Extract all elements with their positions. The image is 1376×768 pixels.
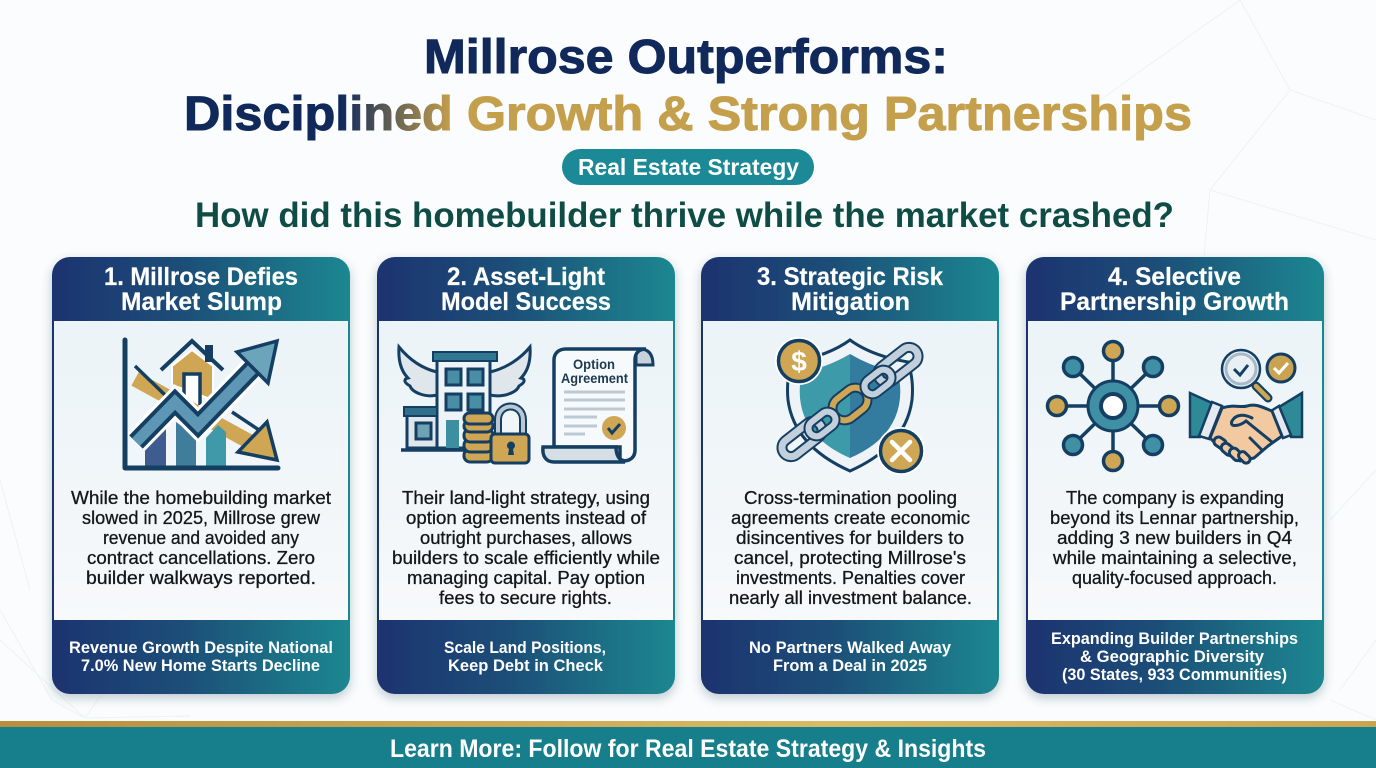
card 3 footer: From a Deal in 2025 bbox=[773, 657, 927, 675]
card 1 footer: Revenue Growth Despite National bbox=[69, 639, 333, 657]
category pill bbox=[562, 149, 814, 185]
panel: card 3 bbox=[701, 257, 999, 694]
card 4 footer: (30 States, 933 Communities) bbox=[1062, 666, 1287, 684]
title bbox=[184, 31, 1192, 141]
card 2 body text bbox=[392, 488, 660, 608]
card 1 body text: revenue and avoided any bbox=[103, 528, 299, 548]
card 4 body text: adding 3 new builders in Q4 bbox=[1057, 528, 1292, 548]
card 2 footer: Scale Land Positions, bbox=[444, 639, 606, 657]
card 4 heading: Partnership Growth bbox=[1060, 288, 1289, 316]
icon: option agreement document bbox=[543, 349, 653, 462]
card 2 body text: Their land-light strategy, using bbox=[402, 488, 650, 508]
card 2 footer bbox=[444, 639, 606, 675]
card 2 footer: Keep Debt in Check bbox=[448, 657, 604, 675]
card 4 body text: quality-focused approach. bbox=[1072, 568, 1277, 588]
card 1 body text bbox=[71, 488, 331, 588]
card 2 heading bbox=[441, 263, 611, 316]
card 1 body text: builder walkways reported. bbox=[86, 568, 316, 588]
card 2 body text: fees to secure rights. bbox=[439, 588, 612, 608]
card 4 body text: beyond its Lennar partnership, bbox=[1050, 508, 1299, 528]
icon: handshake with magnifier bbox=[1190, 350, 1302, 465]
card 1 heading bbox=[104, 263, 298, 316]
card 1 footer bbox=[69, 639, 333, 675]
title: Disciplined Growth & Strong Partnerships bbox=[184, 88, 1192, 141]
question subtitle: How did this homebuilder thrive while the market crashed? bbox=[195, 196, 1174, 235]
card 1 body text: slowed in 2025, Millrose grew bbox=[82, 508, 321, 528]
card 3 body text bbox=[729, 488, 972, 608]
card 3 body text: investments. Penalties cover bbox=[736, 568, 965, 588]
panel: card 2 bbox=[377, 257, 675, 694]
card 2 body text: managing capital. Pay option bbox=[407, 568, 645, 588]
card 3 heading: 3. Strategic Risk bbox=[757, 263, 943, 291]
document title bbox=[561, 357, 628, 386]
card 2 heading: 2. Asset-Light bbox=[447, 263, 606, 291]
document title: Agreement bbox=[561, 371, 628, 386]
panel: card 4 bbox=[1026, 257, 1324, 694]
card 4 heading bbox=[1060, 263, 1289, 316]
document title: Option bbox=[573, 357, 615, 372]
card 2 body text: outright purchases, allows bbox=[420, 528, 632, 548]
card 4 footer bbox=[1051, 630, 1298, 684]
card 4 footer: Expanding Builder Partnerships bbox=[1051, 630, 1298, 648]
icon: winged building, coins and lock bbox=[399, 347, 530, 463]
card 1 body text: contract cancellations. Zero bbox=[87, 548, 315, 568]
card 4 footer: & Geographic Diversity bbox=[1080, 648, 1265, 666]
card 4 body text: while maintaining a selective, bbox=[1052, 548, 1297, 568]
card 1 footer: 7.0% New Home Starts Decline bbox=[81, 657, 320, 675]
card 3 footer: No Partners Walked Away bbox=[749, 639, 952, 657]
footer banner bbox=[0, 721, 1376, 768]
card 3 body text: cancel, protecting Millrose's bbox=[734, 548, 966, 568]
card 3 body text: agreements create economic bbox=[731, 508, 970, 528]
icon: cancel badge bbox=[877, 427, 925, 475]
card 4 body text bbox=[1050, 488, 1299, 588]
icon: dollar coin: $ bbox=[791, 346, 807, 377]
card 2 heading: Model Success bbox=[441, 288, 611, 316]
card 4 heading: 4. Selective bbox=[1108, 263, 1241, 291]
icon: market chart with house bbox=[125, 340, 278, 470]
card 3 footer bbox=[749, 639, 952, 675]
card 1 heading: Market Slump bbox=[121, 288, 282, 316]
card 3 body text: Cross-termination pooling bbox=[744, 488, 957, 508]
icon: dollar coin bbox=[775, 337, 823, 385]
card 3 heading bbox=[757, 263, 943, 316]
card 2 body text: builders to scale efficiently while bbox=[392, 548, 660, 568]
card 3 body text: nearly all investment balance. bbox=[729, 588, 972, 608]
category pill: Real Estate Strategy bbox=[578, 154, 799, 180]
card 1 body text: While the homebuilding market bbox=[71, 488, 331, 508]
title: Millrose Outperforms: bbox=[424, 31, 948, 84]
footer banner: Learn More: Follow for Real Estate Strategy & Insights bbox=[390, 735, 986, 763]
card 4 body text: The company is expanding bbox=[1066, 488, 1284, 508]
card 3 body text: disincentives for builders to bbox=[736, 528, 964, 548]
card 1 heading: 1. Millrose Defies bbox=[104, 263, 298, 291]
chain bbox=[778, 344, 922, 460]
card 2 body text: option agreements instead of bbox=[406, 508, 647, 528]
icon: partner network hub bbox=[1048, 342, 1178, 470]
card 3 heading: Mitigation bbox=[791, 288, 910, 316]
icon: shield with chain bbox=[775, 337, 925, 475]
panel: card 1 bbox=[52, 257, 350, 694]
